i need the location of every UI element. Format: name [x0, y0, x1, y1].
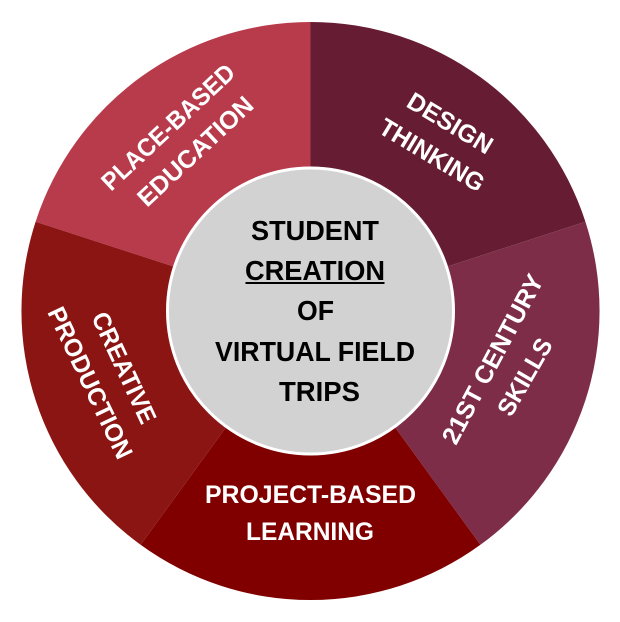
center text [215, 215, 415, 407]
center text: TRIPS [279, 376, 360, 407]
center circle [168, 168, 454, 454]
segment: place-based education [36, 22, 310, 311]
label: project-based learning: PROJECT-BASED [205, 481, 416, 509]
segment: creative production [21, 222, 310, 545]
label: project-based learning [205, 481, 416, 546]
segment: project-based learning [141, 311, 480, 600]
segment: 21st century skills [310, 222, 600, 545]
label: project-based learning: LEARNING [246, 518, 374, 546]
center text: CREATION [245, 255, 385, 286]
label: 21st century skills: 21ST CENTURY [437, 269, 550, 449]
center text: STUDENT [251, 215, 379, 246]
label: creative production: PRODUCTION [42, 303, 138, 464]
center text: VIRTUAL FIELD [215, 336, 415, 367]
label: creative production: CREATIVE [86, 308, 162, 428]
center text: OF [297, 295, 334, 326]
segment: design thinking [310, 22, 585, 311]
label: place-based education: EDUCATION [132, 91, 259, 212]
label: design thinking: THINKING [374, 113, 489, 198]
label: design thinking: DESIGN [402, 87, 498, 160]
label: 21st century skills: SKILLS [492, 333, 559, 421]
label: place-based education: PLACE-BASED [96, 59, 241, 196]
